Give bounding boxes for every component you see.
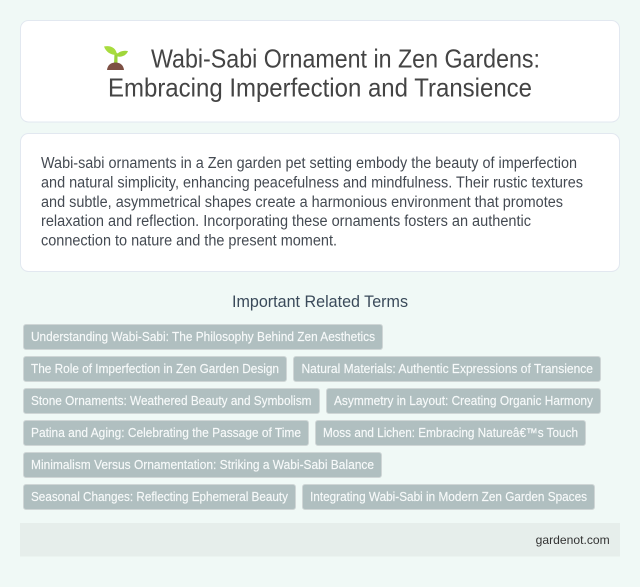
text block: description: connection to nature and the present moment. (41, 232, 337, 250)
text block: description: and natural simplicity, enhancing peacefulness and mindfulness. Their rustic textures (41, 174, 583, 192)
tag: integrating wabi-sabi: Integrating Wabi-Sabi in Modern Zen Garden Spaces (310, 490, 587, 504)
tag: moss and lichen: Moss and Lichen: Embracing Natureâ€™s Touch (323, 426, 578, 440)
tag: integrating wabi-sabi (302, 484, 594, 510)
tag: understanding wabi-sabi: Understanding Wabi-Sabi: The Philosophy Behind Zen Aesthetics (31, 330, 375, 344)
tag: stone ornaments (24, 388, 320, 414)
text block: description (41, 155, 583, 250)
tag: role of imperfection (24, 356, 286, 382)
tag: seasonal changes: Seasonal Changes: Reflecting Ephemeral Beauty (31, 490, 289, 504)
icon: sprout (104, 46, 128, 70)
title: Wabi-Sabi Ornament in Zen Gardens: (151, 44, 540, 74)
tag: seasonal changes (24, 484, 296, 510)
tag: role of imperfection: The Role of Imperfection in Zen Garden Design (31, 362, 279, 376)
title: Embracing Imperfection and Transience (108, 72, 532, 102)
tag: minimalism versus ornamentation: Minimalism Versus Ornamentation: Striking a Wabi-Sabi Balance (31, 458, 374, 472)
tag: patina and aging: Patina and Aging: Celebrating the Passage of Time (31, 426, 301, 440)
tag: patina and aging (24, 420, 308, 446)
panel: footer (20, 523, 620, 556)
tag: natural materials: Natural Materials: Authentic Expressions of Transience (302, 362, 593, 376)
tag: asymmetry in layout (326, 388, 600, 414)
heading: related terms: Important Related Terms (232, 293, 408, 311)
text block: description: relaxation and reflection. Incorporating these ornaments fosters an authentic (41, 213, 531, 230)
tag: understanding wabi-sabi (24, 324, 382, 350)
panel: description (20, 134, 620, 272)
tag: asymmetry in layout: Asymmetry in Layout: Creating Organic Harmony (334, 394, 594, 408)
tag: stone ornaments: Stone Ornaments: Weathered Beauty and Symbolism (31, 394, 312, 408)
tag: minimalism versus ornamentation (24, 452, 382, 478)
tag: natural materials (294, 356, 600, 382)
text block: description: and subtle, asymmetrical shapes create a harmonious environment that promotes (41, 194, 563, 211)
text block: description: Wabi-sabi ornaments in a Zen garden pet setting embody the beauty of imperfection (41, 155, 577, 172)
tag: moss and lichen (316, 420, 586, 446)
panel: related terms tags (24, 324, 600, 510)
panel: header (20, 20, 620, 122)
footer text: gardenot.com (536, 533, 610, 547)
title (108, 44, 540, 102)
